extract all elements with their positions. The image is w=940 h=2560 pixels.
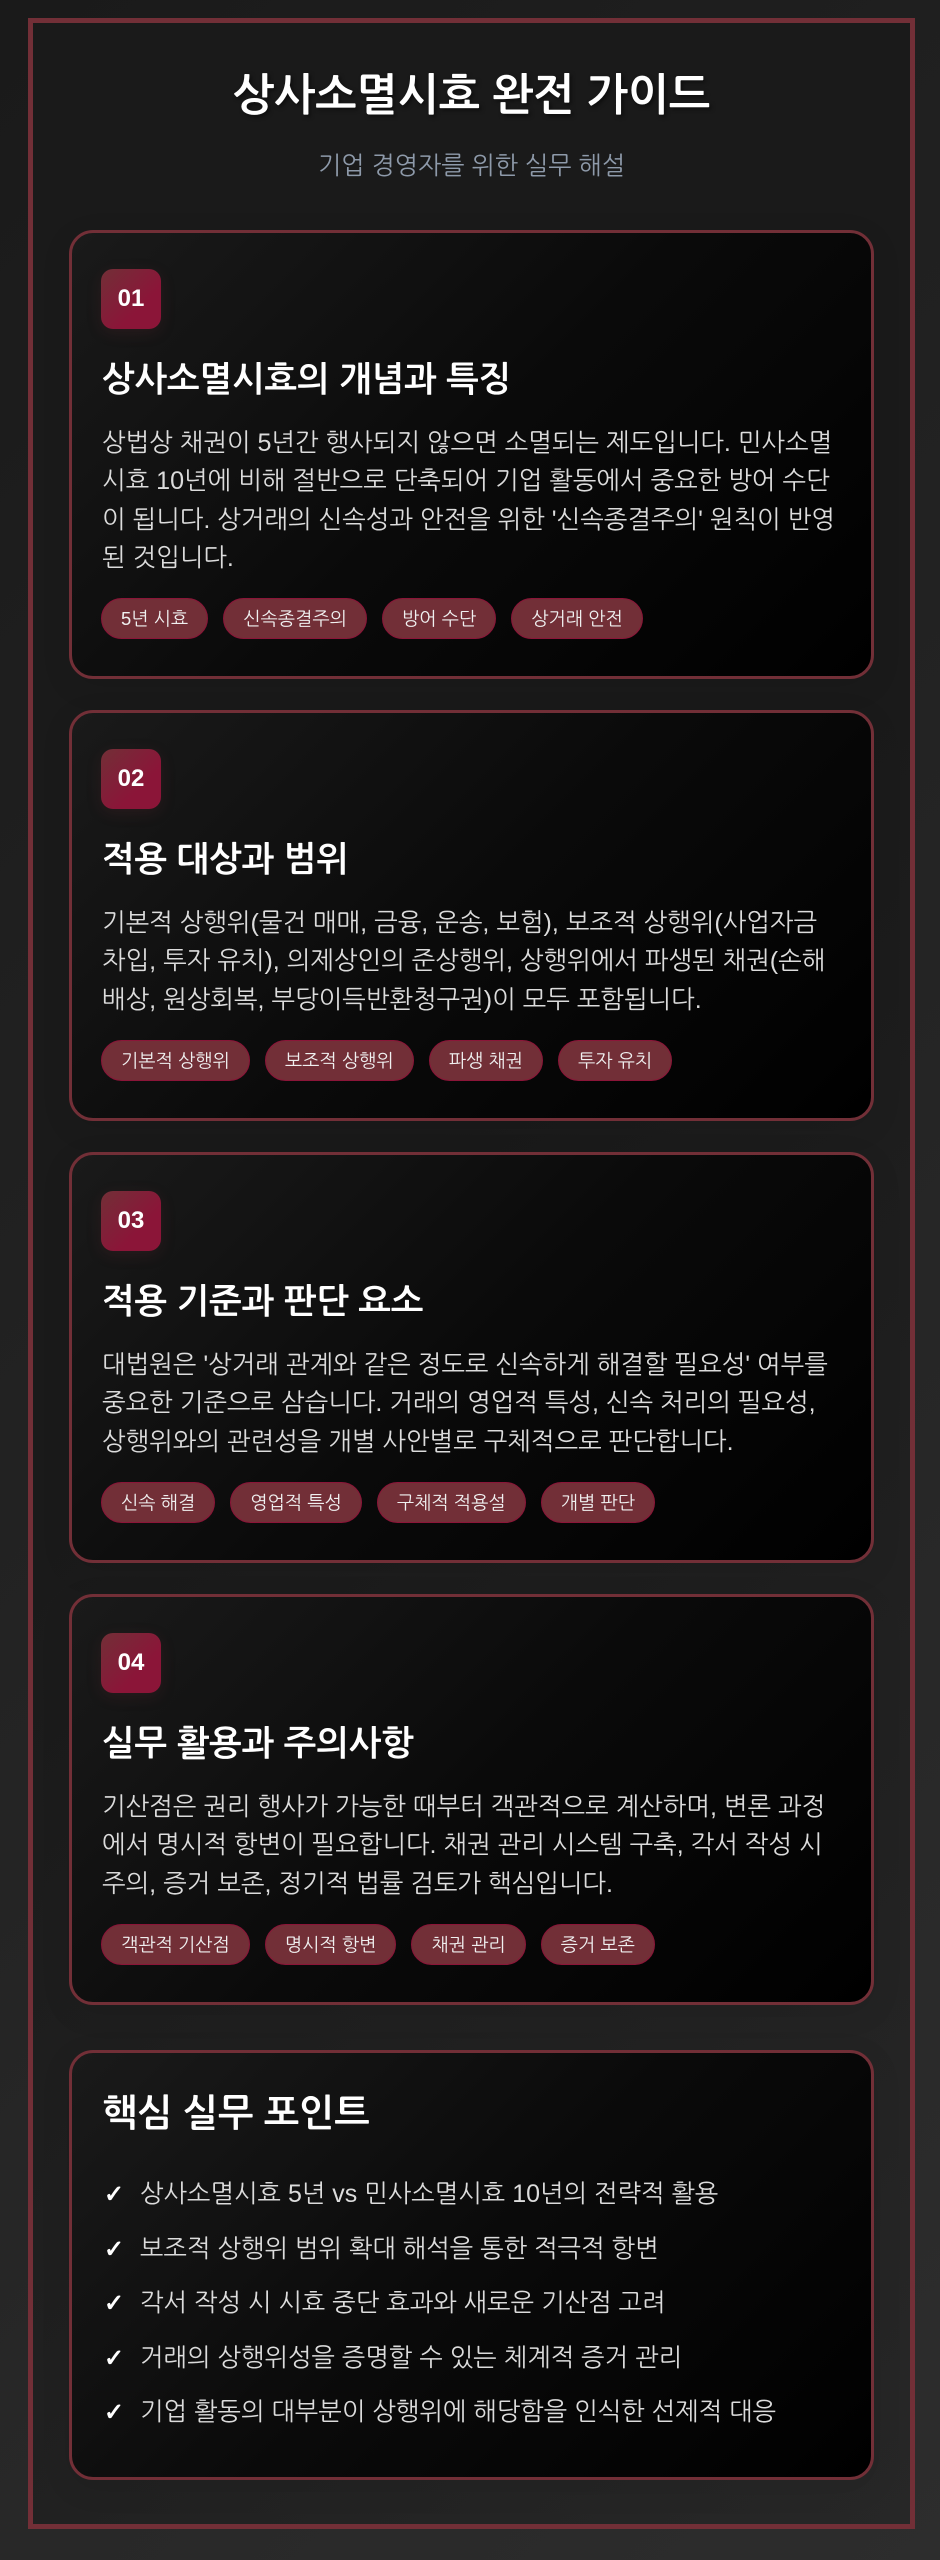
tags 01: 신속종결주의 [243, 608, 347, 629]
tags 04: 객관적 기산점 [121, 1934, 230, 1955]
badge 04 [101, 1633, 161, 1693]
tags 03: 신속 해결 [121, 1492, 195, 1513]
text block 01: 시효 10년에 비해 절반으로 단축되어 기업 활동에서 중요한 방어 수단 [102, 467, 830, 495]
tags 04: 증거 보존 [561, 1934, 635, 1955]
text block 04 [102, 1793, 825, 1898]
text block 03: 상행위와의 관련성을 개별 사안별로 구체적으로 판단합니다. [102, 1428, 734, 1456]
point 5: ✓ [104, 2399, 124, 2426]
point 1: ✓ [104, 2181, 124, 2208]
tags 01: 상거래 안전 [531, 608, 623, 629]
text block 01: 된 것입니다. [102, 544, 234, 572]
text block 03 [102, 1351, 828, 1456]
point 2: ✓ [104, 2236, 124, 2263]
text block 03: 중요한 기준으로 삼습니다. 거래의 영업적 특성, 신속 처리의 필요성, [102, 1389, 816, 1417]
tags 04 [101, 1924, 655, 1965]
tags 01 [101, 598, 643, 639]
text block 02: 차입, 투자 유치), 의제상인의 준상행위, 상행위에서 파생된 채권(손해 [102, 947, 825, 975]
point 3: 각서 작성 시 시효 중단 효과와 새로운 기산점 고려 [140, 2289, 666, 2317]
tags 03 [101, 1482, 655, 1523]
heading 01: 상사소멸시효의 개념과 특징 [102, 361, 511, 399]
tags 02: 보조적 상행위 [285, 1050, 394, 1071]
text block 01 [102, 429, 835, 572]
text block 04: 에서 명시적 항변이 필요합니다. 채권 관리 시스템 구축, 각서 작성 시 [102, 1831, 823, 1859]
heading 03: 적용 기준과 판단 요소 [102, 1283, 423, 1321]
tags 02: 기본적 상행위 [121, 1050, 230, 1071]
badge 03: 03 [118, 1207, 144, 1234]
point 3: ✓ [104, 2290, 124, 2317]
badge 02 [101, 749, 161, 809]
text block 04: 기산점은 권리 행사가 가능한 때부터 객관적으로 계산하며, 변론 과정 [102, 1793, 825, 1821]
title: 상사소멸시효 완전 가이드 [233, 71, 710, 120]
point 2: 보조적 상행위 범위 확대 해석을 통한 적극적 항변 [140, 2235, 659, 2263]
subtitle: 기업 경영자를 위한 실무 해설 [318, 153, 625, 180]
text block 02: 기본적 상행위(물건 매매, 금융, 운송, 보험), 보조적 상행위(사업자금 [102, 909, 817, 937]
panel: section 01 [69, 230, 874, 679]
text block 01: 상법상 채권이 5년간 행사되지 않으면 소멸되는 제도입니다. 민사소멸 [102, 429, 832, 457]
point 4: 거래의 상행위성을 증명할 수 있는 체계적 증거 관리 [140, 2344, 682, 2372]
badge 01 [101, 269, 161, 329]
tags 02: 투자 유치 [578, 1050, 652, 1071]
panel: section 02 [69, 710, 874, 1121]
badge 04: 04 [118, 1649, 144, 1676]
panel: section 04 [69, 1594, 874, 2005]
heading 02: 적용 대상과 범위 [102, 841, 349, 879]
tags 02 [101, 1040, 672, 1081]
text block 03: 대법원은 '상거래 관계와 같은 정도로 신속하게 해결할 필요성' 여부를 [102, 1351, 828, 1379]
badge 03 [101, 1191, 161, 1251]
heading: key points: 핵심 실무 포인트 [102, 2092, 370, 2134]
tags 03: 개별 판단 [561, 1492, 635, 1513]
badge 02: 02 [118, 765, 144, 792]
tags 03: 영업적 특성 [250, 1492, 342, 1513]
tags 04: 채권 관리 [431, 1934, 506, 1955]
tags 03: 구체적 적용설 [397, 1492, 506, 1513]
panel: section 03 [69, 1152, 874, 1563]
panel: key points [69, 2050, 874, 2480]
text block 02: 배상, 원상회복, 부당이득반환청구권)이 모두 포함됩니다. [102, 986, 702, 1014]
tags 04: 명시적 항변 [285, 1934, 376, 1955]
point 1: 상사소멸시효 5년 vs 민사소멸시효 10년의 전략적 활용 [140, 2180, 718, 2208]
text block 02 [102, 909, 825, 1014]
badge 01: 01 [118, 285, 144, 312]
text block 01: 이 됩니다. 상거래의 신속성과 안전을 위한 '신속종결주의' 원칙이 반영 [102, 506, 835, 534]
heading 04: 실무 활용과 주의사항 [102, 1725, 414, 1763]
tags 02: 파생 채권 [449, 1050, 523, 1071]
tags 01: 5년 시효 [121, 608, 188, 629]
text block 04: 주의, 증거 보존, 정기적 법률 검토가 핵심입니다. [102, 1870, 613, 1898]
point 5: 기업 활동의 대부분이 상행위에 해당함을 인식한 선제적 대응 [140, 2398, 776, 2426]
point 4: ✓ [104, 2345, 124, 2372]
tags 01: 방어 수단 [402, 608, 476, 629]
